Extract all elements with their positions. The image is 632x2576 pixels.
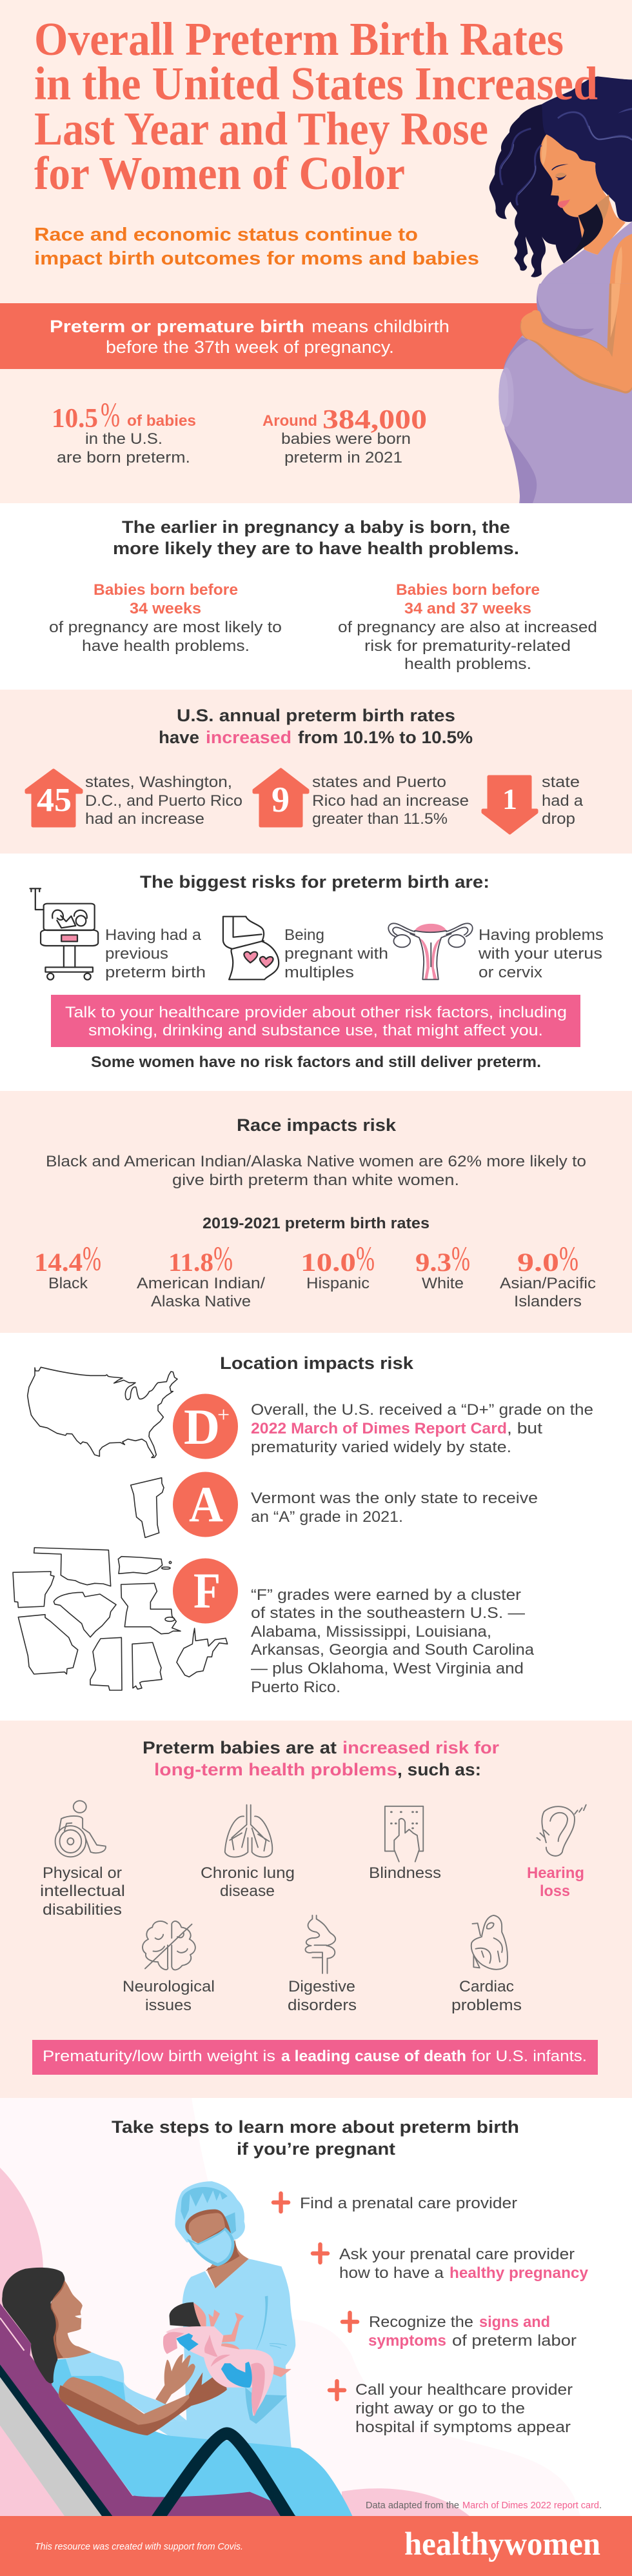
stat: Asian/Pacific Islanders: % [559, 1239, 578, 1278]
step: signs and symptoms [342, 2313, 577, 2350]
step: healthy pregnancy [313, 2244, 589, 2282]
stat: Hispanic: % [356, 1239, 375, 1278]
label: hearing loss: Hearing [527, 1864, 584, 1882]
text: 45 states: states, Washington, [85, 774, 232, 791]
label: disabilities [40, 1864, 125, 1919]
step: signs and symptoms: Recognize the [369, 2313, 473, 2331]
label: cardiac problems: problems [451, 1997, 522, 2014]
arrow up: 9 states [254, 770, 308, 826]
step: healthy pregnancy: Ask your prenatal care provider [339, 2246, 575, 2263]
heading: U.S. annual preterm birth rates [177, 706, 455, 725]
icon: lungs [225, 1805, 272, 1857]
column: 34 and 37 weeks: 34 and 37 weeks [404, 600, 531, 617]
source note [366, 2501, 602, 2511]
label: blindness: Blindness [369, 1864, 441, 1882]
text: multiples: Being [284, 926, 324, 944]
stat: American Indian/Alaska Native: 11.8 [168, 1248, 213, 1277]
badge: A [173, 1472, 238, 1537]
callout: other risk factors: Talk to your healthcare provider about other risk factors, including [65, 1004, 567, 1021]
logo: healthywomen: healthywomen [404, 2526, 600, 2562]
panel: long-term health problems [0, 1721, 632, 2098]
heading: Preterm babies are at [143, 1738, 337, 1757]
text: previous preterm birth: Having had a [105, 926, 202, 944]
source note: March of Dimes 2022 report card [462, 2501, 599, 2511]
text: 1 state [542, 774, 584, 828]
column: before 34 weeks [49, 581, 282, 655]
banner text: definition: Preterm or premature birth [50, 317, 304, 336]
stat: Black: Black [48, 1275, 88, 1292]
map: F-grade states [13, 1548, 228, 1690]
panel: earlier birth [0, 503, 632, 690]
text: F grades: of states in the southeastern U.S. — [251, 1604, 525, 1622]
icon: uterus [388, 923, 473, 979]
heading: Location impacts risk [220, 1353, 414, 1373]
source note: . [599, 2501, 602, 2511]
stat: around 384,000: 384,000 [322, 405, 427, 435]
step: signs and symptoms: symptoms [368, 2332, 446, 2350]
heading: long-term health problems [154, 1760, 397, 1779]
arrow up: 45 states [26, 770, 81, 826]
callout: other risk factors [51, 995, 580, 1047]
text: 9 states [312, 774, 469, 828]
text block: 62% more likely: Black and American Indian/Alaska Native women are 62% more likely to [46, 1153, 586, 1170]
step: call provider: hospital if symptoms appear [355, 2419, 571, 2436]
stat: American Indian/Alaska Native: % [213, 1239, 233, 1278]
heading: Race impacts risk [237, 1115, 397, 1135]
background blobs [0, 2098, 580, 2516]
arrow down: 1 state [483, 777, 537, 833]
text: previous preterm birth [105, 926, 206, 981]
text: 45 states [85, 774, 242, 828]
text: F grades: — plus Oklahoma, West Virginia and [251, 1660, 524, 1677]
text: previous preterm birth: previous [105, 945, 168, 963]
text: D+ grade: prematurity varied widely by state. [251, 1439, 511, 1456]
column: before 34 weeks: 34 weeks [130, 600, 201, 617]
text: multiples: pregnant with [284, 945, 388, 963]
badge: F [173, 1559, 238, 1623]
title: Overall Preterm Birth Rates [34, 13, 564, 65]
step: healthy pregnancy: how to have a [339, 2264, 444, 2282]
heading [113, 517, 519, 558]
text: 1 state: state [542, 774, 580, 791]
title [34, 13, 598, 199]
column: before 34 weeks: Babies born before [94, 581, 238, 599]
text: 9 states: Rico had an increase [312, 792, 469, 810]
text: uterus or cervix: Having problems [479, 926, 604, 944]
label: neurological issues: issues [145, 1997, 192, 2014]
label: cardiac problems [451, 1978, 522, 2014]
label: disabilities: Physical or [43, 1864, 122, 1882]
column: before 34 weeks: have health problems. [82, 637, 250, 655]
stat: White [415, 1239, 470, 1292]
heading [143, 1738, 500, 1779]
arrow up: 45 states: 45 [37, 782, 72, 819]
label: digestive disorders: disorders [288, 1997, 357, 2014]
stat: around 384,000: babies were born [281, 430, 411, 448]
heading: increased risk for [342, 1738, 500, 1757]
text: 1 state: had a [542, 792, 584, 810]
text: D+ grade [251, 1401, 593, 1456]
text: multiples: multiples [284, 964, 354, 981]
banner text: definition: before the 37th week of pregnancy. [106, 337, 394, 357]
subheading: 2019-2021 preterm birth rates [202, 1215, 430, 1232]
stat: Black: 14.4 [34, 1248, 83, 1277]
heading: from 10.1% to 10.5% [298, 728, 473, 747]
map: Vermont [131, 1478, 164, 1537]
icon: brain with slash [143, 1921, 195, 1970]
label: disabilities: intellectual [40, 1882, 125, 1900]
text: multiples [284, 926, 388, 981]
panel: biggest risks [0, 854, 632, 1091]
step: call provider [330, 2381, 573, 2436]
stat: 10.5% of babies: are born preterm. [57, 449, 190, 466]
panel: annual rates [0, 690, 632, 854]
callout: leading cause of death: Prematurity/low birth weight is [43, 2048, 275, 2065]
text: uterus or cervix: or cervix [479, 964, 542, 981]
stat: Black: % [83, 1239, 101, 1278]
text: D+ grade: , but [507, 1420, 542, 1437]
label: chronic lung disease: Chronic lung [201, 1864, 295, 1882]
column: 34 and 37 weeks: of pregnancy are also at increased [338, 619, 597, 636]
text: F grades: Arkansas, Georgia and South Carolina [251, 1641, 535, 1659]
text: 9 states: states and Puerto [312, 774, 446, 791]
stat: Hispanic: Hispanic [306, 1275, 370, 1292]
arrow up: 9 states: 9 [272, 780, 290, 820]
stat: White: % [451, 1239, 470, 1278]
step: signs and symptoms: signs and [479, 2313, 550, 2331]
subtitle: impact birth outcomes for moms and babies [34, 248, 479, 269]
note: no risk factors: Some women have no risk factors and still deliver preterm. [91, 1053, 541, 1071]
heading: The earlier in pregnancy a baby is born, the [122, 517, 510, 537]
label: hearing loss: loss [540, 1882, 570, 1900]
stat: 10.5% of babies [52, 395, 196, 466]
banner text: definition [50, 317, 449, 357]
label: digestive disorders [288, 1978, 357, 2014]
heading: if you’re pregnant [237, 2139, 395, 2159]
heading: increased [206, 728, 291, 747]
stat: Asian/Pacific Islanders: 9.0 [517, 1248, 559, 1277]
label: cardiac problems: Cardiac [459, 1978, 514, 1995]
heading: , such as: [397, 1760, 481, 1779]
title: in the United States Increased [34, 57, 598, 110]
text: Vermont grade [251, 1490, 538, 1526]
subtitle: Race and economic status continue to [34, 225, 418, 245]
label: disabilities: disabilities [43, 1901, 122, 1919]
step: call provider: right away or go to the [355, 2400, 525, 2417]
text: F grades: Alabama, Mississippi, Louisiana, [251, 1623, 491, 1641]
text: Vermont grade: an “A” grade in 2021. [251, 1508, 403, 1526]
callout: other risk factors: smoking, drinking and substance use, that might affect you. [88, 1022, 543, 1039]
step: healthy pregnancy: healthy pregnancy [449, 2264, 589, 2282]
label: digestive disorders: Digestive [288, 1978, 355, 1995]
callout: leading cause of death: for U.S. infants. [471, 2048, 587, 2065]
panel: take steps [0, 2098, 632, 2523]
text: F grades [251, 1586, 535, 1696]
badge: F: F [193, 1563, 221, 1619]
badge: D+ [173, 1393, 238, 1459]
text: previous preterm birth: preterm birth [105, 964, 206, 981]
column: before 34 weeks: of pregnancy are most likely to [49, 619, 282, 636]
chair arch [154, 2433, 293, 2523]
chair [0, 2303, 299, 2516]
map: United States [28, 1367, 177, 1457]
baby [163, 2302, 291, 2416]
panel: location impacts risk [0, 1333, 632, 1721]
step: signs and symptoms: of preterm labor [452, 2332, 577, 2350]
text: 1 state: drop [542, 810, 575, 828]
stat: Asian/Pacific Islanders: Asian/Pacific [500, 1275, 596, 1292]
badge: D+: + [217, 1403, 230, 1427]
stat: Hispanic [301, 1239, 375, 1292]
stat: American Indian/Alaska Native: American Indian/ [137, 1275, 265, 1292]
text: 45 states: had an increase [85, 810, 204, 828]
stat: 10.5% of babies: 10.5 [52, 404, 98, 434]
icon: wheelchair [55, 1801, 106, 1857]
heading [159, 706, 473, 747]
stat: 10.5% of babies: of babies [127, 412, 196, 430]
heading: have [159, 728, 199, 747]
text: F grades: Puerto Rico. [251, 1679, 341, 1696]
patient gown [52, 2352, 352, 2516]
stat: White: White [422, 1275, 464, 1292]
text: F grades: “F” grades were earned by a cluster [251, 1586, 521, 1604]
text block: 62% more likely [46, 1153, 586, 1189]
label: neurological issues: Neurological [123, 1978, 215, 1995]
icon: heart [471, 1915, 508, 1970]
illustration: mother, nurse and baby [0, 2181, 352, 2523]
label: hearing loss [527, 1864, 584, 1900]
text: D+ grade: 2022 March of Dimes Report Card [251, 1420, 507, 1437]
label: neurological issues [123, 1978, 215, 2014]
stat: around 384,000 [262, 405, 427, 466]
column: 34 and 37 weeks: Babies born before [396, 581, 540, 599]
stat: Asian/Pacific Islanders: Islanders [514, 1293, 582, 1310]
step: call provider: Call your healthcare provider [355, 2381, 573, 2399]
title: for Women of Color [34, 147, 405, 199]
banner text: definition: means childbirth [311, 317, 449, 336]
icon: ear [537, 1805, 586, 1856]
heading: The biggest risks for preterm birth are: [140, 872, 489, 892]
text block: 62% more likely: give birth preterm than white women. [172, 1172, 459, 1189]
column: 34 and 37 weeks: risk for prematurity-related [364, 637, 571, 655]
icon: pregnant belly with hearts [223, 917, 279, 979]
title: Last Year and They Rose [34, 103, 488, 155]
stat: around 384,000: preterm in 2021 [284, 449, 402, 466]
icon: incubator [30, 888, 98, 980]
stat: White: 9.3 [415, 1248, 451, 1277]
text: uterus or cervix: with your uterus [478, 945, 602, 963]
badge: D+: D [184, 1399, 220, 1455]
column: 34 and 37 weeks [338, 581, 597, 673]
stat: Hispanic: 10.0 [301, 1248, 356, 1277]
nurse [148, 2181, 295, 2448]
arrow down: 1 state: 1 [502, 783, 517, 815]
stat: American Indian/Alaska Native: Alaska Native [151, 1293, 251, 1310]
subtitle [34, 225, 479, 269]
callout: leading cause of death: a leading cause of death [281, 2048, 466, 2065]
text: 45 states: D.C., and Puerto Rico [85, 792, 242, 810]
stat: Black [34, 1239, 101, 1292]
stat: around 384,000: Around [262, 412, 317, 430]
callout: leading cause of death [32, 2040, 598, 2075]
stat: 10.5% of babies: % [101, 395, 120, 434]
stat: 10.5% of babies: in the U.S. [85, 430, 163, 448]
heading [112, 2117, 519, 2159]
source note: Data adapted from the [366, 2501, 459, 2511]
text: 9 states: greater than 11.5% [312, 810, 448, 828]
sponsor note: This resource was created with support from Covis. [35, 2541, 243, 2552]
icon: braille [385, 1806, 423, 1862]
illustration: pregnant woman [489, 76, 632, 503]
footer [0, 2516, 632, 2576]
badge: A: A [189, 1476, 223, 1532]
stat: American Indian/Alaska Native [137, 1239, 265, 1310]
panel: hero [0, 0, 632, 503]
panel: race impacts risk [0, 1091, 632, 1333]
icon: digestive tract [306, 1915, 335, 1973]
text: Vermont grade: Vermont was the only state to receive [251, 1490, 538, 1507]
stat: Asian/Pacific Islanders [500, 1239, 596, 1310]
text: D+ grade: Overall, the U.S. received a “D+” grade on the [251, 1401, 593, 1419]
text: uterus or cervix [478, 926, 604, 981]
heading: Take steps to learn more about preterm birth [112, 2117, 519, 2137]
banner background [0, 303, 580, 369]
step: find provider: Find a prenatal care provider [300, 2195, 517, 2212]
label: chronic lung disease: disease [220, 1882, 275, 1900]
column: 34 and 37 weeks: health problems. [404, 655, 531, 673]
label: chronic lung disease [201, 1864, 295, 1900]
heading: more likely they are to have health problems. [113, 539, 519, 558]
patient [2, 2268, 227, 2435]
